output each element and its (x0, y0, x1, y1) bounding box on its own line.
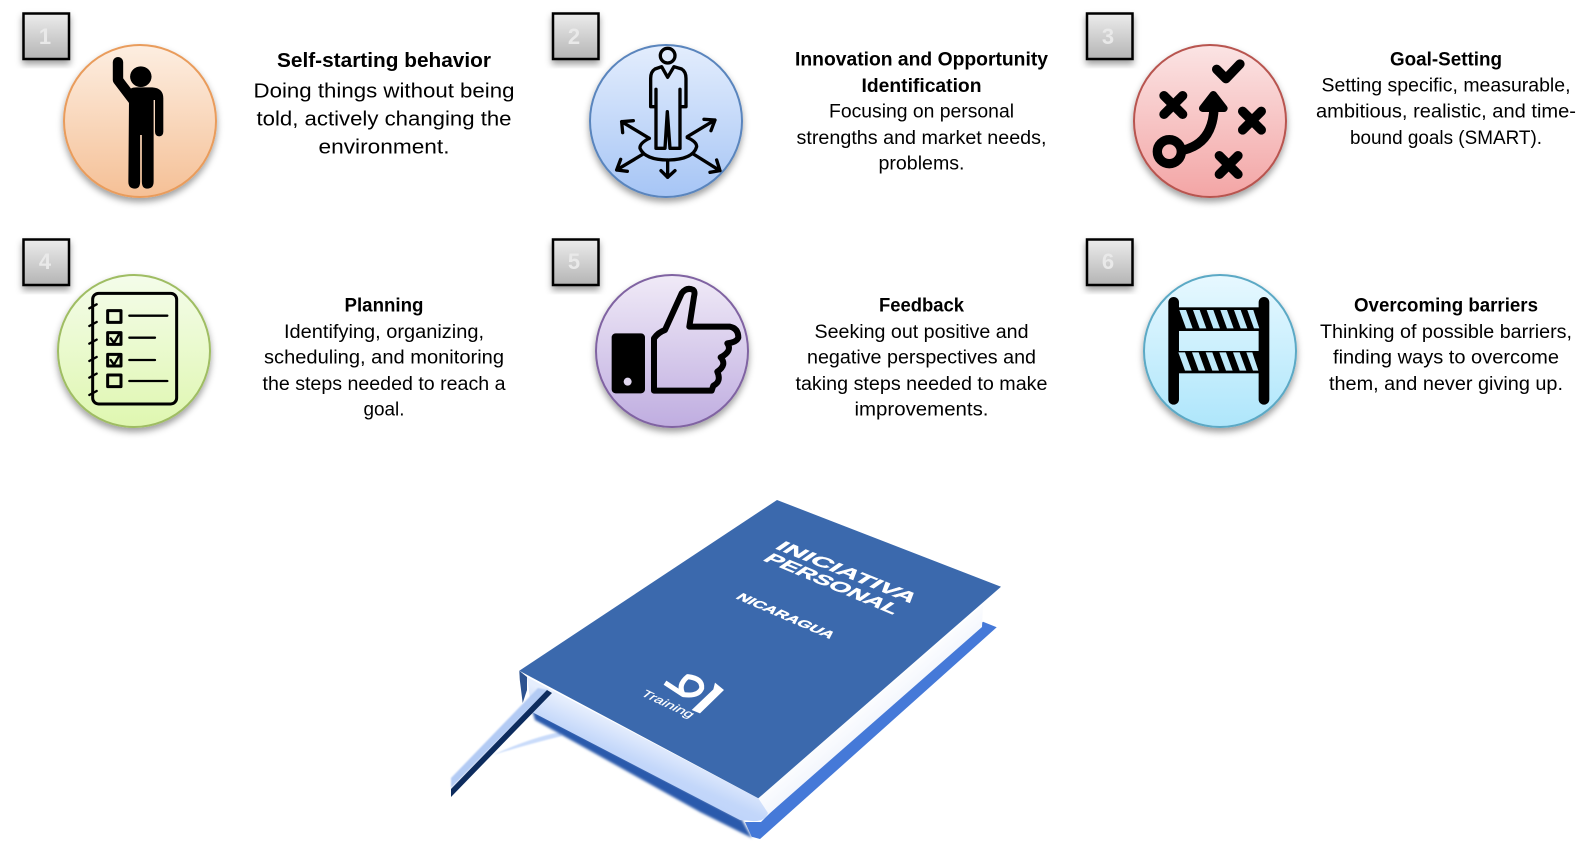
number badge 3: 3 (1102, 24, 1114, 49)
heading and description 3: bound goals (SMART). (1350, 128, 1542, 149)
heading and description 3: Goal-Setting (1390, 50, 1502, 70)
book illustration (451, 500, 1001, 839)
panel: feedback (553, 240, 1048, 427)
heading and description 2: Innovation and Opportunity (795, 50, 1048, 70)
number badge 6: 6 (1102, 249, 1114, 274)
heading and description 6: finding ways to overcome (1333, 348, 1559, 368)
cover text: Training (638, 688, 698, 720)
panel: overcoming barriers (1087, 240, 1572, 427)
heading and description 6: Overcoming barriers (1354, 296, 1538, 316)
heading and description 5: taking steps needed to make (796, 374, 1048, 395)
heading and description 2 (795, 50, 1048, 174)
icon: person raising hand (118, 62, 163, 189)
icon: thumbs up (612, 289, 738, 393)
cover text (638, 539, 923, 720)
number badge 5: 5 (568, 249, 580, 274)
icon circle 5 (596, 275, 748, 427)
heading and description 2: problems. (878, 154, 964, 174)
heading and description 2: Focusing on personal (829, 102, 1014, 122)
number badge 2 (553, 14, 598, 59)
heading and description 5: Seeking out positive and (814, 322, 1028, 343)
heading and description 3: ambitious, realistic, and time- (1316, 102, 1576, 122)
number badge 3 (1087, 14, 1132, 59)
heading and description 5 (796, 296, 1048, 420)
heading and description 1: Self-starting behavior (277, 49, 491, 72)
heading and description 1: told, actively changing the (256, 108, 512, 130)
heading and description 3 (1316, 50, 1576, 149)
heading and description 1: Doing things without being (254, 80, 514, 102)
panel: goal-setting (1087, 14, 1576, 197)
number badge 2: 2 (568, 24, 580, 49)
heading and description 3: Setting specific, measurable, (1322, 76, 1570, 96)
cover text: INICIATIVA (770, 539, 923, 606)
icon: strategy play with arrow and crosses (1157, 64, 1261, 174)
icon circle 1 (64, 45, 216, 197)
logo: PI (665, 677, 724, 713)
icon: striped road barrier (1174, 302, 1264, 399)
heading and description 2: strengths and market needs, (796, 128, 1046, 149)
number badge 6 (1087, 240, 1132, 285)
number badge 5 (553, 240, 598, 285)
panel: innovation and opportunity identification (553, 14, 1048, 197)
heading and description 6: Thinking of possible barriers, (1320, 322, 1572, 343)
heading and description 6: them, and never giving up. (1329, 374, 1563, 395)
heading and description 4: Planning (344, 296, 424, 316)
icon: notebook checklist (89, 293, 177, 404)
heading and description 5: Feedback (879, 296, 964, 316)
heading and description 1 (254, 49, 514, 158)
icon circle 4 (58, 275, 210, 427)
heading and description 4 (262, 296, 506, 420)
front cover (519, 500, 1001, 798)
number badge 1: 1 (39, 24, 51, 49)
icon circle 3 (1134, 45, 1286, 197)
number badge 1 (24, 14, 69, 59)
icon circle 6 (1144, 275, 1296, 427)
cover text: PERSONAL (758, 551, 906, 617)
icon: person with radiating arrows (617, 48, 720, 177)
heading and description 4: Identifying, organizing, (284, 322, 484, 343)
book body: pages, back cover, ribbons (451, 605, 997, 839)
heading and description 1: environment. (318, 136, 450, 158)
heading and description 5: negative perspectives and (807, 348, 1036, 368)
number badge 4 (24, 240, 69, 285)
panel: self-starting behavior (24, 14, 514, 197)
heading and description 4: goal. (364, 400, 404, 420)
number badge 4: 4 (39, 249, 52, 274)
cover text: NICARAGUA (733, 591, 840, 640)
heading and description 4: the steps needed to reach a (262, 374, 506, 395)
heading and description 4: scheduling, and monitoring (264, 348, 504, 368)
heading and description 5: improvements. (854, 400, 988, 420)
panel: planning (24, 240, 506, 427)
heading and description 6 (1320, 296, 1572, 395)
heading and description 2: Identification (862, 76, 982, 97)
icon circle 2 (590, 45, 742, 197)
